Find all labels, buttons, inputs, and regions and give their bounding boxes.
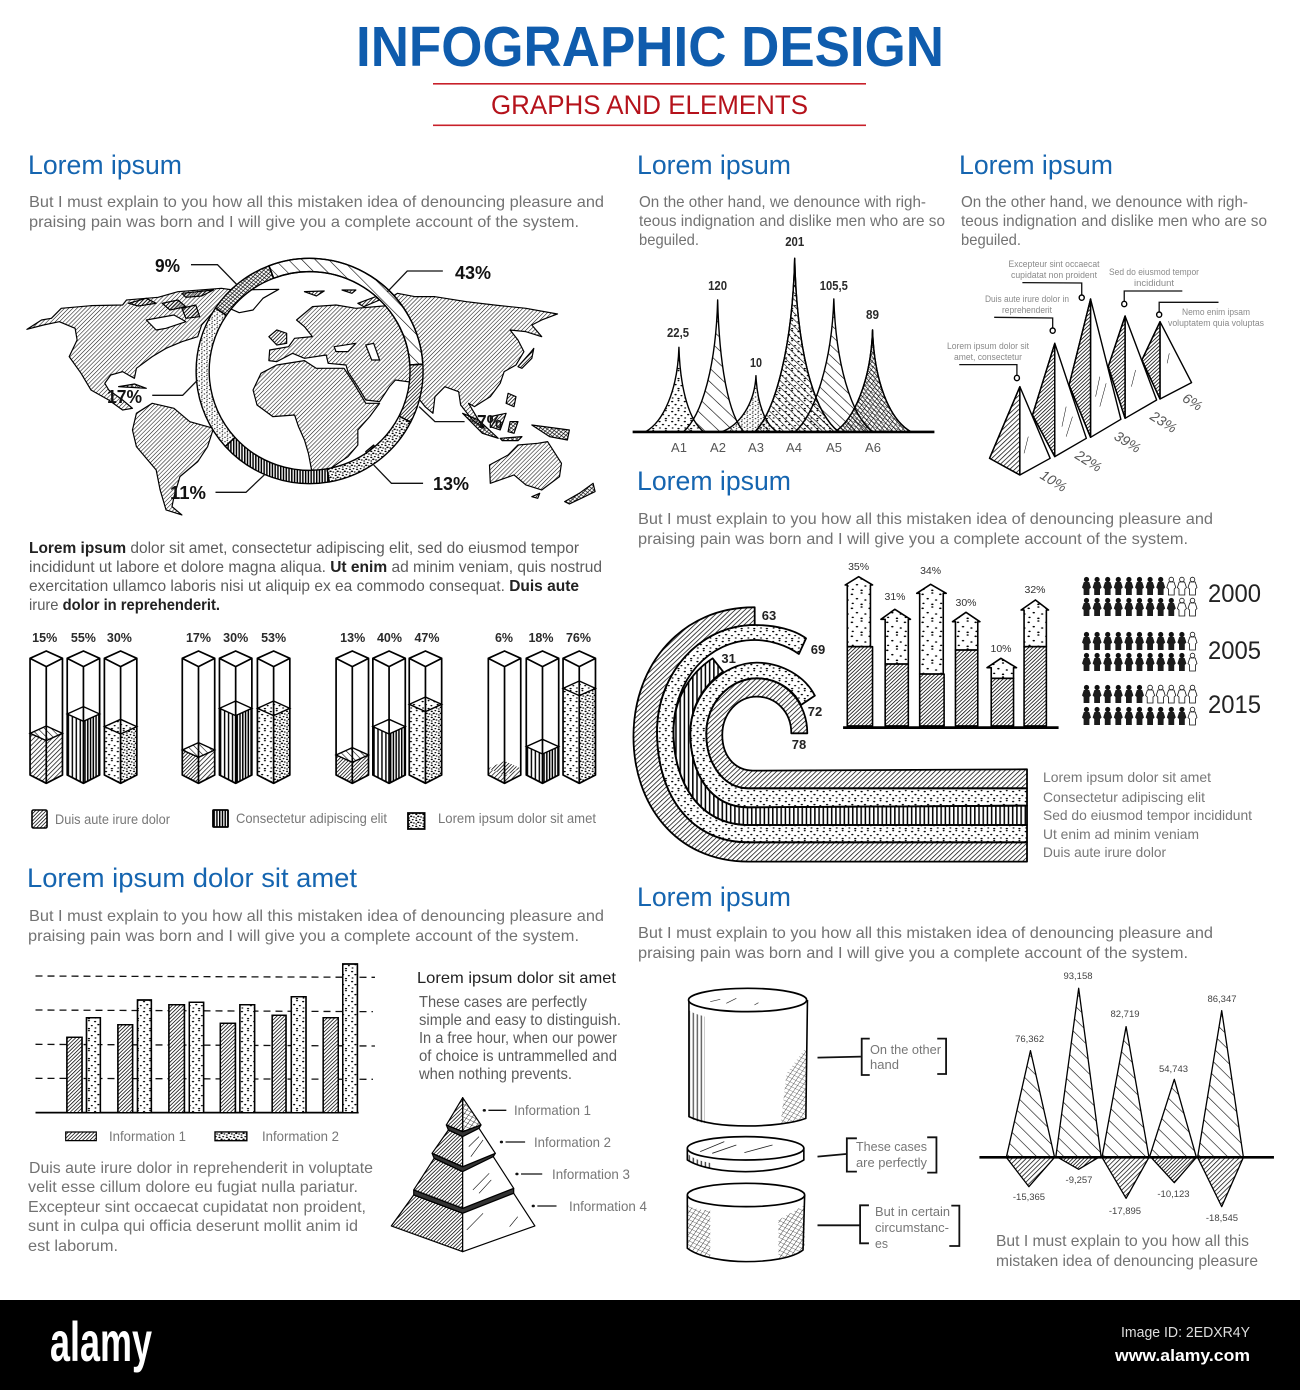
paragraph under map: Lorem ipsum dolor sit amet, consectetur adipiscing elit, sed do eiusmod tempor <box>29 540 580 557</box>
pyramid callouts: Duis aute irure dolor in <box>985 294 1069 304</box>
pictogram rows: people <box>1082 577 1197 725</box>
text under spikes: mistaken idea of denouncing pleasure <box>996 1253 1258 1270</box>
spike values: -15,365 <box>1013 1192 1045 1203</box>
arc values: 31 <box>721 651 736 666</box>
paragraph under map: irure dolor in reprehenderit. <box>29 597 220 614</box>
spike values: 93,158 <box>1063 971 1093 982</box>
arc values <box>721 608 825 752</box>
arrow bar percentages: 32% <box>1024 584 1046 596</box>
rotated pyramid percentages: 6% <box>1180 390 1205 414</box>
ring percentages: 13% <box>433 474 469 494</box>
pyramid callouts: cupidatat non proident <box>1011 270 1097 280</box>
pyramid callouts: Sed do eiusmod tempor <box>1109 267 1199 277</box>
heading: cylinders: Lorem ipsum <box>637 882 791 912</box>
bar percent labels: 15% <box>32 631 57 645</box>
intro text: world map: But I must explain to you how all this mistaken idea of denouncing pleasure and <box>29 194 604 211</box>
intro text: dolor sit amet: praising pain was born and I will give you a complete account of the system. <box>28 928 579 945</box>
panel: arcs, arrows and people <box>633 466 1261 862</box>
paragraph under map: incididunt ut labore et dolore magna aliqua. Ut enim ad minim veniam, quis nostrud <box>29 559 602 576</box>
arc legend text: Lorem ipsum dolor sit amet <box>1043 769 1211 785</box>
text under grouped bars: Excepteur sint occaecat cupidatat non proident, <box>28 1199 366 1216</box>
pyramid callouts: Excepteur sint occaecat <box>1008 259 1100 269</box>
pyramid callouts: Lorem ipsum dolor sit <box>947 341 1029 351</box>
bracket texts: On the other <box>870 1042 942 1057</box>
panel: pyramids <box>947 150 1267 495</box>
paragraph under map: exercitation ullamco laboris nisi ut aliquip ex ea commodo consequat. Duis aute <box>29 578 579 595</box>
paragraph under map <box>29 540 602 614</box>
peak values: 22,5 <box>667 325 689 340</box>
pyramid callouts <box>947 259 1264 362</box>
3D bar groups <box>30 651 595 783</box>
pyramid callouts: voluptatem quia voluptas <box>1168 318 1264 328</box>
bar percent labels: 6% <box>495 631 513 645</box>
text block: pyramid: of choice is untrammelled and <box>419 1048 617 1065</box>
peak axis labels: A6 <box>865 440 881 455</box>
spike values: -18,545 <box>1206 1213 1238 1224</box>
text under grouped bars: Duis aute irure dolor in reprehenderit in voluptate <box>29 1160 373 1177</box>
footer bar with watermark: alamy <box>50 1310 152 1373</box>
intro text: arcs: But I must explain to you how all this mistaken idea of denouncing pleasure and <box>638 511 1213 528</box>
arrow bar percentages: 35% <box>848 561 869 573</box>
text block: pyramid: These cases are perfectly <box>419 994 587 1011</box>
subtitle with rules: GRAPHS AND ELEMENTS <box>491 90 808 120</box>
ring percentages: 43% <box>455 263 491 283</box>
arc legend text: Sed do eiusmod tempor incididunt <box>1043 807 1252 823</box>
peak axis labels: A5 <box>826 440 842 455</box>
intro text: pyramids <box>961 194 1267 249</box>
spike values: 54,743 <box>1159 1064 1188 1075</box>
arc values: 72 <box>808 704 822 719</box>
intro text: dolor sit amet: But I must explain to you how all this mistaken idea of denouncing pleasure and <box>29 908 604 925</box>
peak axis labels: A1 <box>671 440 687 455</box>
peak values <box>667 234 879 370</box>
ring percentages: 9% <box>155 256 180 276</box>
text under spikes <box>996 1233 1258 1270</box>
intro text: peaks: On the other hand, we denounce with righ- <box>639 194 926 211</box>
arrow bar percentages: 31% <box>884 591 906 603</box>
arc legend text: Consectetur adipiscing elit <box>1043 789 1205 805</box>
bar percent labels: 17% <box>186 631 211 645</box>
bar percent labels: 76% <box>566 631 591 645</box>
intro text: cylinders: praising pain was born and I will give you a complete account of the system. <box>638 945 1188 962</box>
intro text: world map <box>29 194 604 231</box>
chart: dashed grouped bars <box>36 964 375 1113</box>
bracket texts: es <box>875 1236 888 1251</box>
peak axis labels: A4 <box>786 440 802 455</box>
ring percentages: 17% <box>107 387 142 407</box>
bar percent labels: 47% <box>414 631 440 645</box>
legend: grouped bars: Information 1 <box>109 1128 186 1144</box>
intro text: peaks: beguiled. <box>639 232 699 249</box>
arc values: 69 <box>811 642 825 657</box>
peak axis labels: A3 <box>748 440 764 455</box>
bracket texts <box>856 1042 950 1251</box>
chart: cylinders with brackets <box>687 988 959 1262</box>
text under spikes: But I must explain to you how all this <box>996 1233 1249 1250</box>
arc legend text: Ut enim ad minim veniam <box>1043 826 1199 842</box>
year labels <box>1208 580 1261 719</box>
pyramid labels: Information 1 <box>514 1102 591 1118</box>
text block: pyramid: when nothing prevents. <box>418 1066 572 1083</box>
heading: world map: Lorem ipsum <box>28 150 182 180</box>
panel: 3D bars <box>30 631 596 829</box>
chart: curved band arcs <box>633 607 1027 862</box>
peak values: 105,5 <box>820 278 848 293</box>
chart: tiered pyramid <box>391 1098 557 1252</box>
bar percent labels: 30% <box>223 631 248 645</box>
bar percent labels: 18% <box>528 631 554 645</box>
spike values: 86,347 <box>1207 994 1237 1005</box>
panel: world map <box>27 150 604 614</box>
peak values: 10 <box>750 355 762 370</box>
intro text: world map: praising pain was born and I will give you a complete account of the system. <box>29 214 579 231</box>
text block: pyramid <box>418 994 621 1083</box>
text block: pyramid: simple and easy to distinguish. <box>419 1012 621 1029</box>
peak values: 89 <box>866 307 879 322</box>
footer bar with watermark: www.alamy.com <box>1114 1346 1250 1365</box>
year labels: 2015 <box>1208 691 1261 719</box>
arc values: 78 <box>792 737 806 752</box>
heading: peaks: Lorem ipsum <box>637 150 791 180</box>
bar percent labels: 40% <box>377 631 402 645</box>
panel: grouped bar chart and pyramid <box>27 863 647 1255</box>
peak values: 201 <box>785 234 804 249</box>
intro text: pyramids: On the other hand, we denounce with righ- <box>961 194 1248 211</box>
intro text: cylinders <box>638 925 1213 962</box>
heading: arcs: Lorem ipsum <box>637 466 791 496</box>
heading: pyramids: Lorem ipsum <box>959 150 1113 180</box>
pyramid callouts: incididunt <box>1134 278 1175 288</box>
spike values: 82,719 <box>1110 1009 1140 1020</box>
arrow bar percentages: 34% <box>920 565 941 577</box>
legend: grouped bars <box>66 1128 339 1144</box>
rotated pyramid percentages: 22% <box>1072 446 1105 475</box>
panel: peak chart <box>633 150 945 455</box>
bracket texts: hand <box>870 1057 899 1072</box>
rotated pyramid percentages <box>1038 390 1205 495</box>
pyramid labels: Information 4 <box>569 1198 647 1214</box>
intro text: pyramids: beguiled. <box>961 232 1021 249</box>
legend: 3D bars <box>32 810 596 829</box>
spike values: -17,895 <box>1109 1206 1141 1217</box>
intro text: arcs: praising pain was born and I will give you a complete account of the system. <box>638 531 1188 548</box>
bracket texts: circumstanc- <box>875 1220 949 1235</box>
text block: pyramid: In a free hour, when our power <box>419 1030 618 1047</box>
footer bar with watermark <box>0 1300 1300 1390</box>
text under grouped bars: est laborum. <box>28 1238 118 1255</box>
footer bar with watermark: Image ID: 2EDXR4Y <box>1121 1324 1250 1341</box>
chart: peaks <box>633 258 934 432</box>
legend: grouped bars: Information 2 <box>262 1128 339 1144</box>
bar percent labels: 13% <box>340 631 365 645</box>
intro text: dolor sit amet <box>28 908 604 945</box>
intro text: peaks: teous indignation and dislike men who are so <box>639 213 945 230</box>
arrow bar percentages: 30% <box>955 597 977 609</box>
text under grouped bars: velit esse cillum dolore eu fugiat nulla pariatur. <box>28 1179 358 1196</box>
bar percent labels <box>32 631 591 645</box>
peak axis labels <box>671 440 881 455</box>
text under grouped bars: sunt in culpa qui officia deserunt mollit anim id <box>28 1218 358 1235</box>
arc legend text: Duis aute irure dolor <box>1043 844 1166 860</box>
year labels: 2005 <box>1208 637 1261 665</box>
arrow bar percentages: 10% <box>990 643 1012 655</box>
legend: 3D bars: Duis aute irure dolor <box>55 811 170 827</box>
intro text: cylinders: But I must explain to you how all this mistaken idea of denouncing pleasure and <box>638 925 1213 942</box>
intro text: arcs <box>638 511 1213 548</box>
arrow bar percentages <box>848 561 1046 655</box>
pyramid callouts: reprehenderit <box>1002 305 1052 315</box>
intro text: pyramids: teous indignation and dislike men who are so <box>961 213 1267 230</box>
year labels: 2000 <box>1208 580 1261 608</box>
legend: 3D bars: Lorem ipsum dolor sit amet <box>438 810 596 826</box>
arc legend text <box>1043 769 1252 860</box>
arc values: 63 <box>762 608 776 623</box>
text under grouped bars <box>28 1160 373 1255</box>
bracket texts: But in certain <box>875 1204 950 1219</box>
rotated pyramid percentages: 39% <box>1112 428 1144 456</box>
subheading: pyramid text: Lorem ipsum dolor sit amet <box>417 970 617 987</box>
chart: world map with globe ring <box>27 258 595 515</box>
peak axis labels: A2 <box>710 440 726 455</box>
bar percent labels: 30% <box>107 631 132 645</box>
intro text: peaks <box>639 194 945 249</box>
bar percent labels: 53% <box>261 631 286 645</box>
pyramid labels: Information 3 <box>552 1166 630 1182</box>
bracket texts: are perfectly <box>856 1155 927 1170</box>
pyramid callouts: amet, consectetur <box>954 352 1022 362</box>
chart: up and down spikes <box>979 988 1274 1207</box>
spike values: -10,123 <box>1157 1189 1190 1200</box>
ring percentages <box>107 256 502 503</box>
spike values: -9,257 <box>1066 1175 1092 1186</box>
ring percentages: 11% <box>170 483 206 503</box>
title: INFOGRAPHIC DESIGN <box>356 15 944 79</box>
rotated pyramid percentages: 23% <box>1147 407 1180 436</box>
ring percentages: 7% <box>477 412 502 432</box>
panel: cylinders and spikes <box>637 882 1274 1270</box>
chart: arrow bars <box>843 577 1059 728</box>
pyramid labels <box>514 1102 647 1214</box>
legend: 3D bars: Consectetur adipiscing elit <box>236 810 387 826</box>
peak values: 120 <box>708 278 727 293</box>
heading: dolor sit amet: Lorem ipsum dolor sit amet <box>27 863 358 893</box>
pyramid callouts: Nemo enim ipsam <box>1182 307 1250 317</box>
rotated pyramid percentages: 10% <box>1038 467 1070 495</box>
chart: pyramids with leaders <box>959 283 1219 475</box>
bar percent labels: 55% <box>71 631 96 645</box>
spike values: 76,362 <box>1015 1034 1044 1045</box>
pyramid labels: Information 2 <box>534 1134 611 1150</box>
spike values <box>1013 971 1238 1224</box>
bracket texts: These cases <box>856 1139 927 1154</box>
